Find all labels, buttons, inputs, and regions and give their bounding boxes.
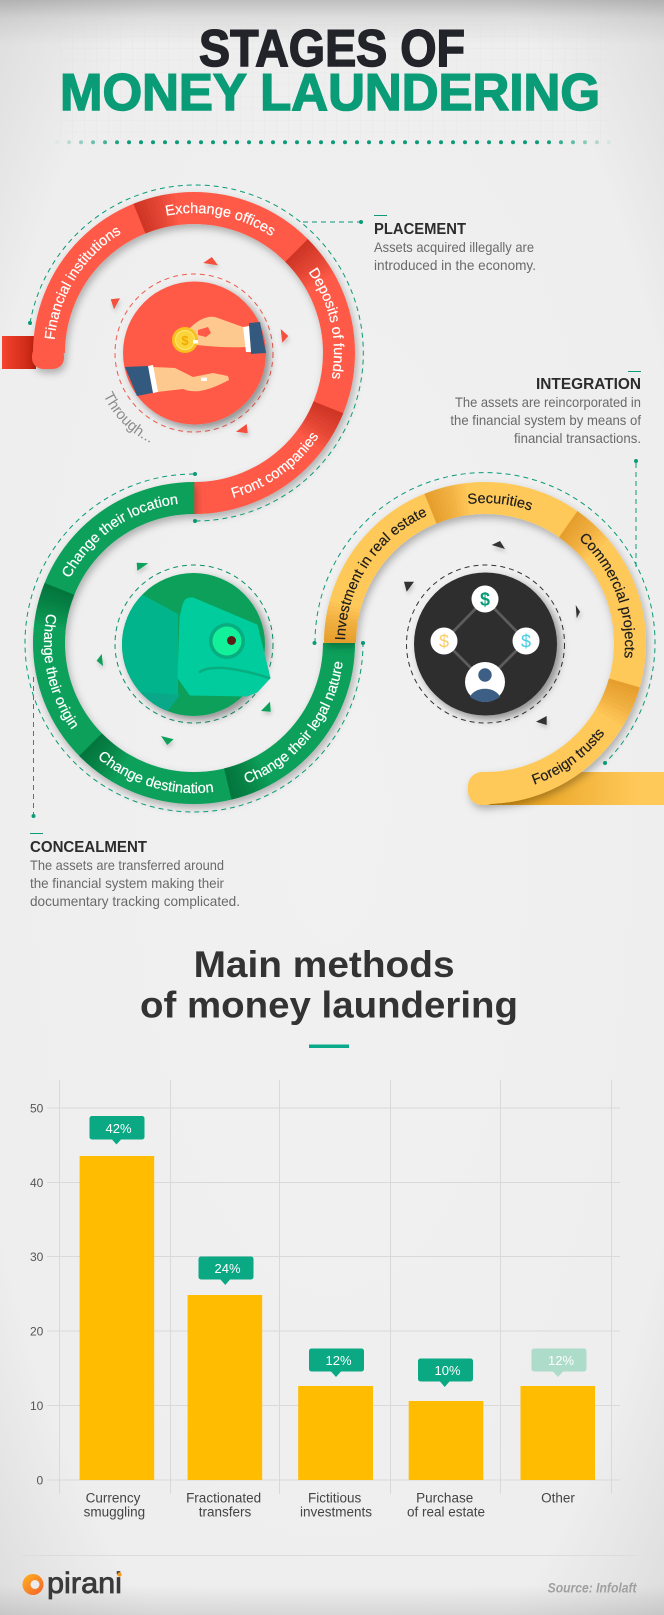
panel: placement ring (red) xyxy=(2,184,364,523)
ring labels: Investment in real estate xyxy=(334,510,426,640)
dashed outline xyxy=(25,474,363,812)
ring labels: Change their location xyxy=(62,496,178,576)
ring labels: Change destination xyxy=(100,752,214,794)
y axis labels xyxy=(30,1102,44,1488)
green band xyxy=(49,498,339,788)
callout: integration: The assets are reincorporated in xyxy=(455,394,641,410)
ring labels: Exchange offices xyxy=(166,202,274,236)
icon: money network: $ xyxy=(521,632,531,652)
heading: main methods: Main methods xyxy=(194,944,455,985)
bar: fictitious investments: investments xyxy=(300,1504,372,1520)
callout: concealment: CONCEALMENT xyxy=(30,839,147,856)
ring labels: Financial institutions xyxy=(44,228,120,339)
ring labels: Foreign trusts xyxy=(532,730,604,784)
logo: pirani: pirani xyxy=(47,1567,122,1600)
orbit arrows xyxy=(111,257,288,433)
ring labels: Deposits of funds xyxy=(308,267,344,379)
y axis labels: 10 xyxy=(30,1399,44,1413)
callout: placement: introduced in the economy. xyxy=(374,257,536,273)
ring labels: Change their origin xyxy=(41,614,77,730)
bar: currency smuggling xyxy=(80,1116,154,1520)
bar: currency smuggling: smuggling xyxy=(84,1504,145,1520)
bar: other: Other xyxy=(541,1490,575,1506)
y axis labels: 50 xyxy=(30,1102,44,1116)
bar: fractionated transfers xyxy=(186,1256,262,1520)
heading: main methods: of money laundering xyxy=(140,984,518,1026)
panel: concealment ring (green) xyxy=(24,472,365,812)
yellow band xyxy=(340,498,630,805)
icon: money network: $ xyxy=(480,590,490,610)
callout: placement xyxy=(303,215,536,273)
bar: currency smuggling: 42% xyxy=(105,1121,132,1136)
orbit arrows xyxy=(97,563,271,745)
callout: concealment: The assets are transferred around xyxy=(30,857,224,873)
ring labels xyxy=(334,493,635,784)
ring labels xyxy=(41,496,343,794)
dashed outline xyxy=(315,473,655,763)
panel: integration ring (yellow) xyxy=(312,472,664,813)
dashed outline xyxy=(30,185,363,521)
icon: hands exchanging coin xyxy=(123,282,266,424)
inner dashed circle xyxy=(115,565,273,723)
callout: concealment: documentary tracking complicated. xyxy=(30,893,240,909)
title: MONEY LAUNDERING xyxy=(60,64,600,122)
ring tail xyxy=(2,336,36,369)
bar: fictitious investments: Fictitious xyxy=(308,1490,361,1506)
bar: fractionated transfers: 24% xyxy=(214,1261,241,1276)
bar: other xyxy=(520,1348,595,1506)
y axis labels: 40 xyxy=(30,1176,44,1190)
callout: integration xyxy=(450,371,641,567)
icon: money network xyxy=(414,572,557,716)
ring labels: Commercial projects xyxy=(580,534,635,658)
bar: fictitious investments: 12% xyxy=(325,1353,352,1368)
through label: Through... xyxy=(105,390,150,442)
bar: purchase of real estate: 10% xyxy=(434,1363,461,1378)
bar: other: 12% xyxy=(548,1353,574,1368)
ring labels xyxy=(44,202,344,498)
callout: placement: Assets acquired illegally are xyxy=(374,239,534,255)
bar: purchase of real estate: Purchase xyxy=(416,1490,473,1506)
callout: integration: financial transactions. xyxy=(514,430,641,446)
y axis labels: 0 xyxy=(36,1474,44,1488)
source note: Source: Infolaft xyxy=(548,1580,637,1596)
bar: purchase of real estate xyxy=(407,1358,485,1520)
inner dashed circle xyxy=(115,274,273,432)
y axis labels: 20 xyxy=(30,1324,44,1338)
bar: purchase of real estate: of real estate xyxy=(407,1504,485,1520)
ring labels: Change their legal nature xyxy=(244,662,343,782)
callout: concealment xyxy=(30,677,240,909)
inner dashed circle xyxy=(406,565,564,723)
title: STAGES OF xyxy=(199,20,465,78)
icon: hands exchanging coin: $ xyxy=(181,333,189,348)
bar chart xyxy=(30,1080,620,1520)
callout: integration: INTEGRATION xyxy=(536,376,641,393)
y axis labels: 30 xyxy=(30,1250,44,1264)
title xyxy=(60,20,600,122)
heading: main methods xyxy=(140,944,518,1048)
bar: fictitious investments xyxy=(298,1348,373,1520)
bar: currency smuggling: Currency xyxy=(86,1490,141,1506)
ring labels: Front companies xyxy=(231,433,318,498)
icon: money network: $ xyxy=(439,632,449,652)
orbit arrows xyxy=(404,541,580,725)
callout: concealment: the financial system making their xyxy=(30,875,224,891)
callout: integration: the financial system by means of xyxy=(450,412,641,428)
callout: placement: PLACEMENT xyxy=(374,221,466,238)
bar: fractionated transfers: transfers xyxy=(199,1504,252,1520)
icon: chameleon xyxy=(100,573,270,720)
ring tail xyxy=(480,772,664,805)
bar: fractionated transfers: Fractionated xyxy=(186,1490,261,1506)
red band xyxy=(32,208,339,498)
ring labels: Securities xyxy=(468,493,532,510)
